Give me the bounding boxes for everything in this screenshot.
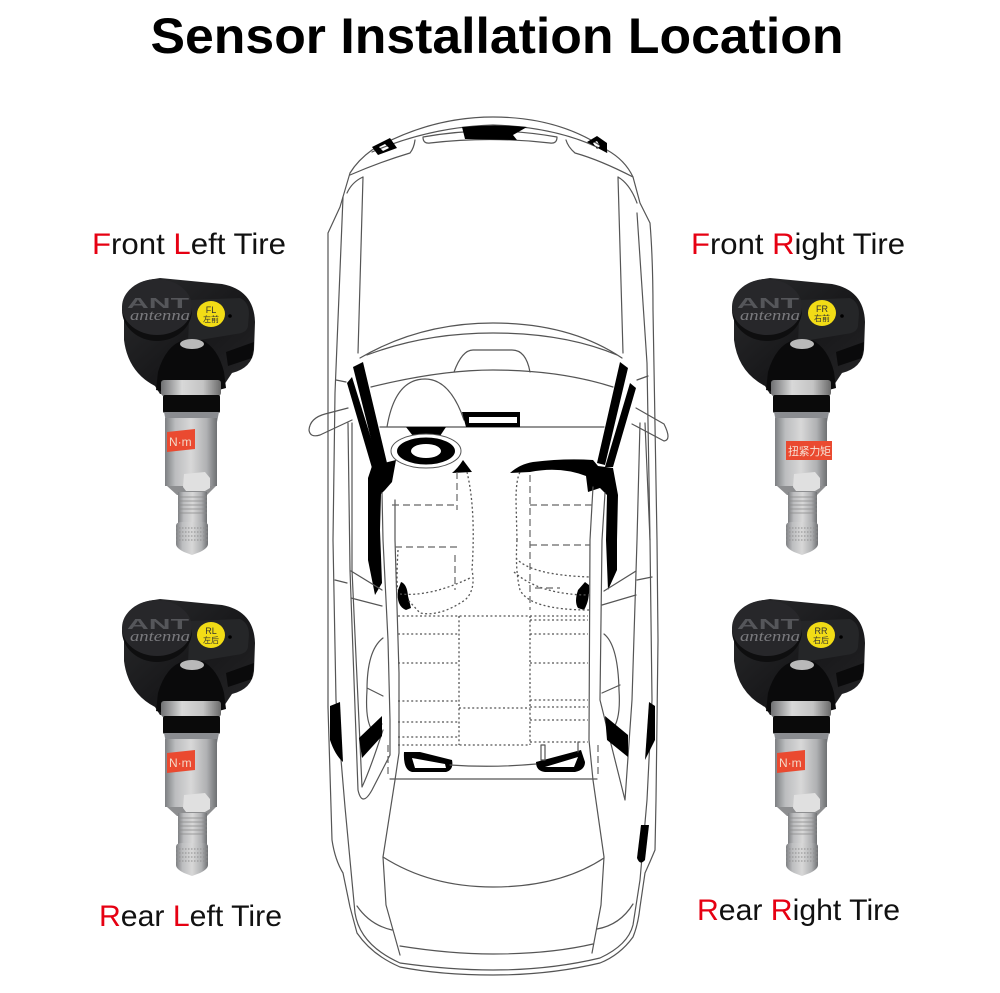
- label: rear left tire: Rear Left Tire: [99, 900, 282, 933]
- car line drawing: [309, 117, 668, 975]
- dotted floor grid: [398, 616, 588, 745]
- sensor: front left: N·m: [169, 435, 192, 449]
- sensor: rear right: antenna: [740, 629, 800, 645]
- sensor: rear left: ANT: [127, 616, 189, 633]
- sensor: front left: [122, 278, 255, 555]
- label: front right tire: Front Right Tire: [691, 228, 905, 261]
- title: Sensor Installation Location: [150, 8, 844, 64]
- sensor: rear left: N·m: [169, 756, 192, 770]
- sensor: rear right: 右后: [813, 635, 829, 646]
- dashboard: [371, 350, 613, 387]
- dark trim: [462, 412, 520, 427]
- mirrors: [309, 376, 668, 441]
- sensor: rear right: N·m: [779, 756, 802, 770]
- sensor: rear right: RR: [814, 626, 828, 636]
- label: rear right tire: Rear Right Tire: [697, 894, 900, 927]
- sensor: front left: FL: [206, 305, 216, 315]
- sensor: front left: 左前: [203, 314, 219, 325]
- sensor: rear left: [122, 599, 255, 876]
- label: front left tire: Front Left Tire: [92, 228, 286, 261]
- inner body line: [333, 197, 652, 970]
- side doors: [348, 423, 390, 799]
- sensor: front right: 扭紧力矩: [788, 443, 831, 459]
- sensor: front right: [732, 278, 865, 555]
- sensor: rear right: ANT: [737, 616, 799, 633]
- seat belts: [398, 582, 411, 610]
- sensor: front right: antenna: [740, 308, 800, 324]
- sensor: front left: ANT: [127, 295, 189, 312]
- front hood and windscreen: [350, 125, 633, 177]
- rear window and trunk: [390, 764, 597, 779]
- car body outline: [328, 117, 658, 975]
- sensor: rear left: antenna: [130, 629, 190, 645]
- sensor: rear left: RL: [205, 626, 217, 636]
- sensor: rear right: [732, 599, 865, 876]
- sensor: front right: 右前: [814, 313, 830, 324]
- sensor: front right: ANT: [737, 295, 799, 312]
- seat outlines: [392, 472, 593, 610]
- sensor: front left: antenna: [130, 308, 190, 324]
- sensor: rear left: 左后: [203, 635, 219, 646]
- sensor: front right: FR: [816, 304, 828, 314]
